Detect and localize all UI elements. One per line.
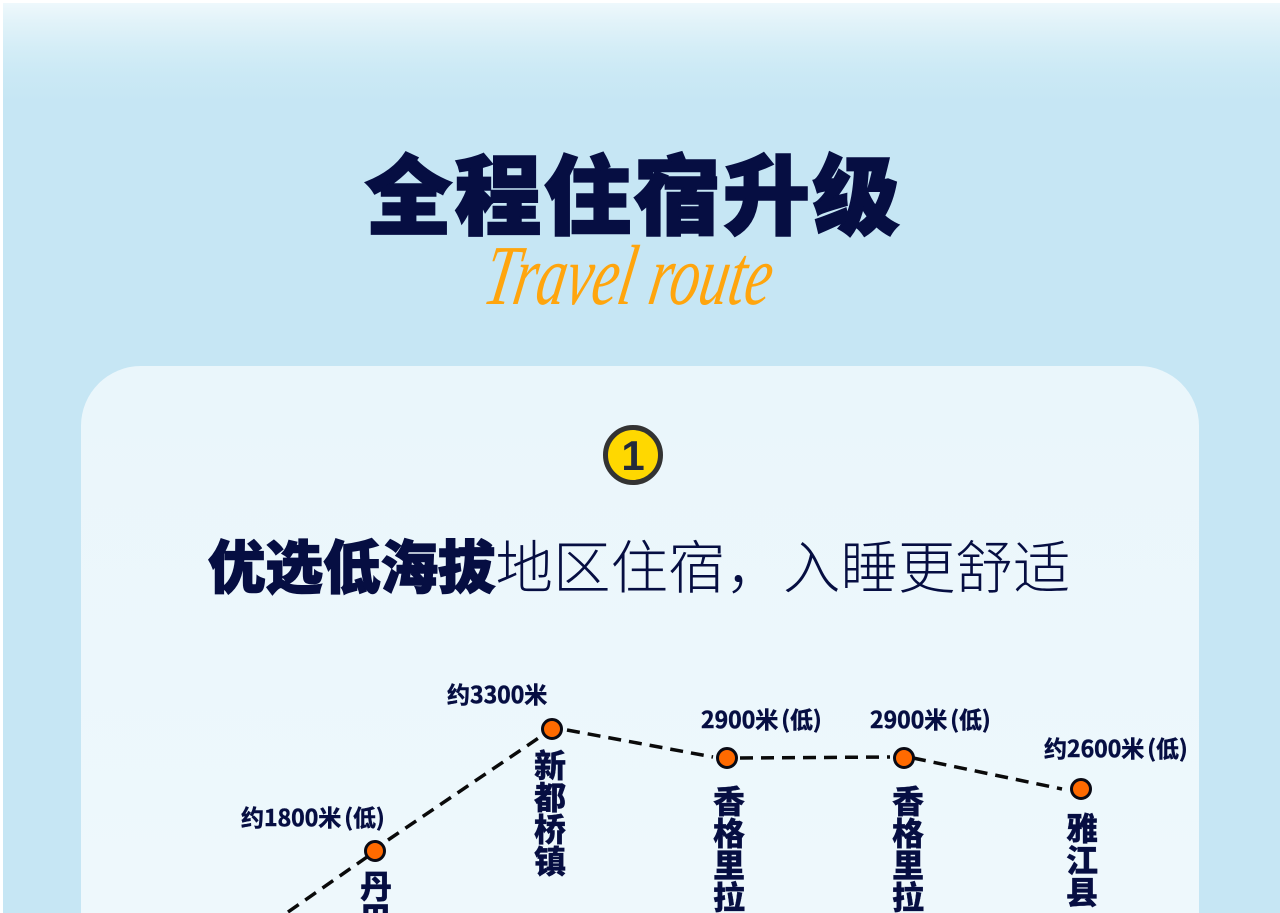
stop: Shangri-La 2: 香	[892, 777, 924, 823]
chart: altitude route line	[241, 676, 1188, 913]
stop: Shangri-La 1	[701, 701, 822, 913]
heading: low altitude lodging: 优选低海拔地区住宿，入睡更舒适	[208, 521, 1070, 605]
stop: Xinduqiao: 镇	[534, 837, 566, 883]
stop: Yajiang: 江	[1066, 836, 1098, 882]
stop: Shangri-La 1: 里	[713, 841, 745, 887]
badge: number 1	[606, 428, 660, 482]
stop: Shangri-La 1: 2900米(低)	[701, 701, 822, 735]
stop: Shangri-La 2: 格	[892, 809, 924, 855]
stop: Danba: 约1800米(低)	[241, 799, 385, 833]
stop: Xinduqiao: 桥	[534, 805, 566, 851]
stop: Shangri-La 1: 格	[713, 809, 745, 855]
stop: Shangri-La 2	[870, 701, 991, 913]
stop: Xinduqiao: 约3300米	[447, 676, 547, 710]
stop: Danba: 丹	[360, 862, 392, 908]
stop: Xinduqiao: 都	[534, 773, 566, 819]
stop: Yajiang	[1044, 730, 1188, 913]
stop: Shangri-La 2: 里	[892, 841, 924, 887]
stop: Yajiang: 县	[1066, 868, 1098, 913]
panel: route card	[81, 366, 1199, 913]
stop: Shangri-La 1: 香	[713, 777, 745, 823]
stop: Xinduqiao	[447, 676, 566, 883]
subtitle: Travel route: Travel route	[478, 229, 781, 324]
stop: Danba	[241, 799, 392, 913]
route dashed line	[288, 730, 1062, 912]
badge: number 1: 1	[621, 432, 645, 479]
stop: Xinduqiao: 新	[534, 741, 566, 787]
stop: Yajiang: 雅	[1066, 804, 1098, 850]
stop: Shangri-La 2: 2900米(低)	[870, 701, 991, 735]
title: 全程住宿升级	[366, 127, 902, 252]
stop: Yajiang: 约2600米(低)	[1044, 730, 1188, 764]
